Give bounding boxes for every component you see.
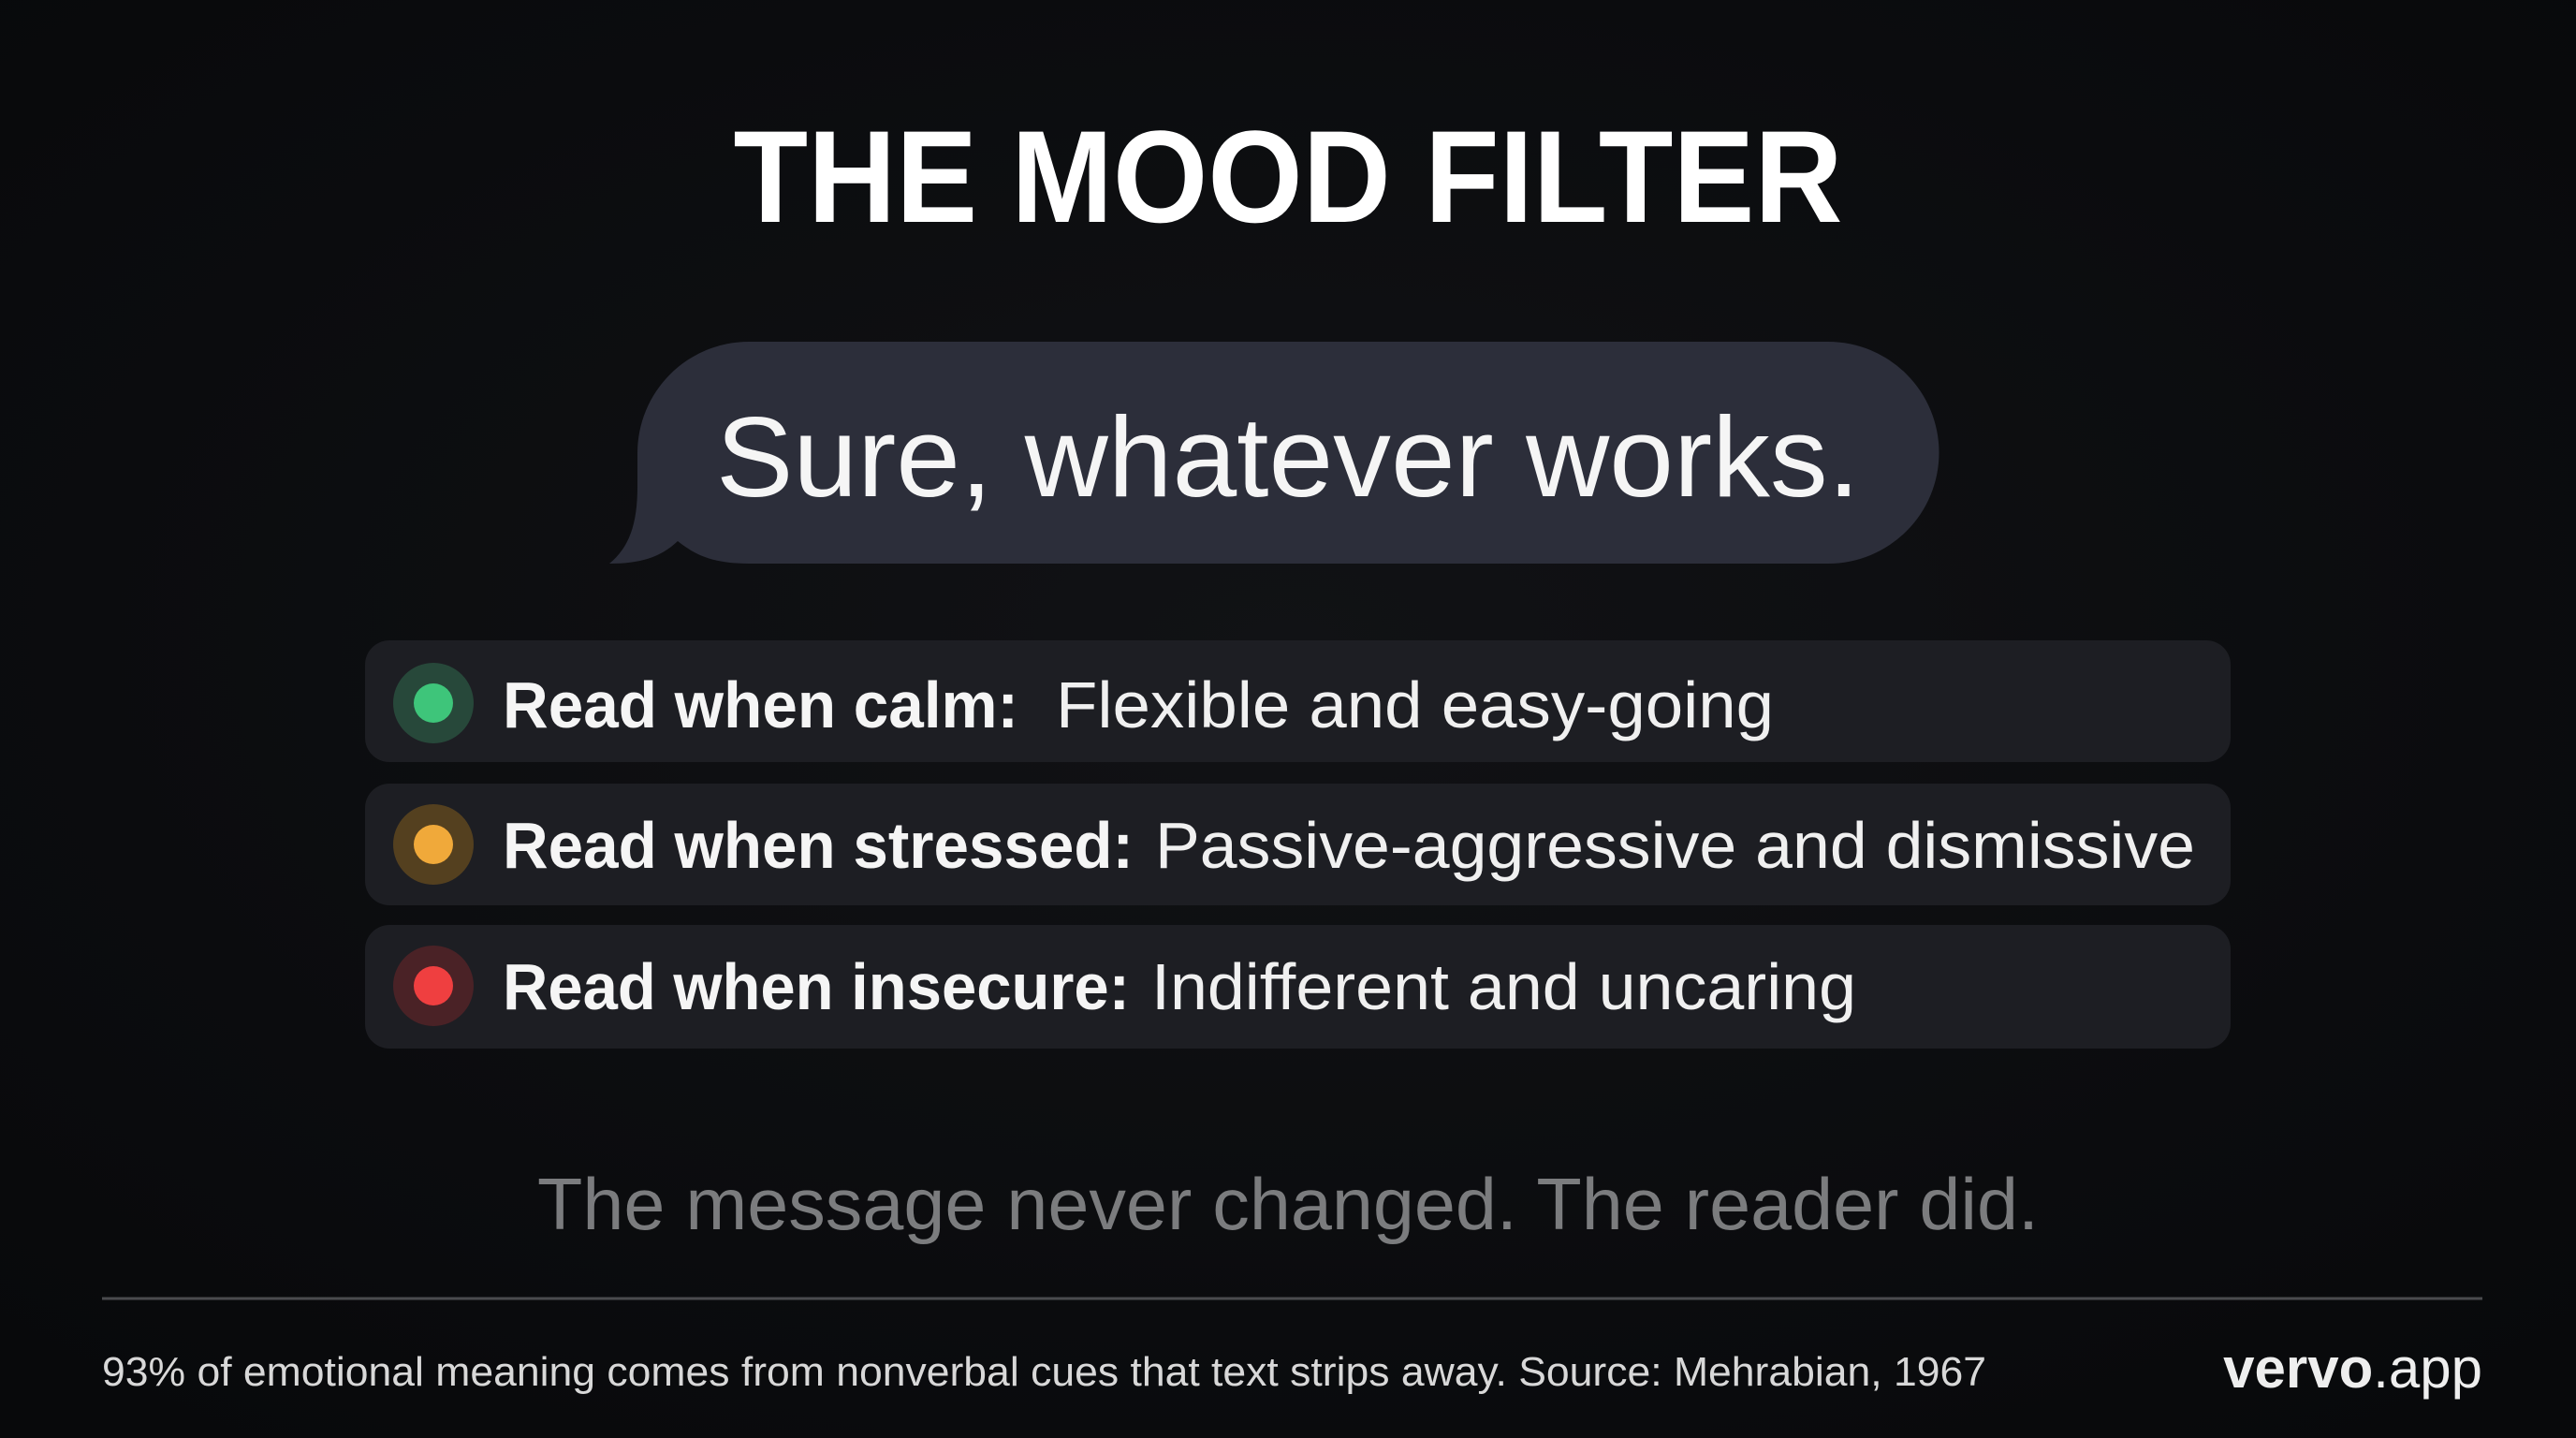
row: insecure: Indifferent and uncaring: [1151, 950, 1856, 1023]
icon: green dot: [393, 663, 474, 743]
row: calm: Flexible and easy-going: [1056, 668, 1774, 741]
row: stressed: Read when stressed:: [503, 809, 1134, 882]
row: stressed: Passive-aggressive and dismissive: [1155, 809, 2195, 882]
row: insecure: [365, 925, 2231, 1049]
title: THE MOOD FILTER: [734, 103, 1842, 250]
footer source: 93% of emotional meaning comes from nonverbal cues that text strips away. Source: Mehrabian, 1967: [102, 1349, 1986, 1395]
icon: red dot: [393, 946, 474, 1026]
row: insecure: Read when insecure:: [503, 950, 1130, 1023]
row: calm: [365, 640, 2231, 762]
row: stressed: [365, 784, 2231, 905]
brand: vervo.app: [2223, 1337, 2482, 1400]
bubble text: Sure, whatever works.: [716, 393, 1860, 521]
tagline: The message never changed. The reader did.: [537, 1163, 2039, 1245]
icon: amber dot: [393, 804, 474, 885]
speech bubble: [609, 342, 1939, 564]
row: calm: Read when calm:: [503, 668, 1018, 741]
